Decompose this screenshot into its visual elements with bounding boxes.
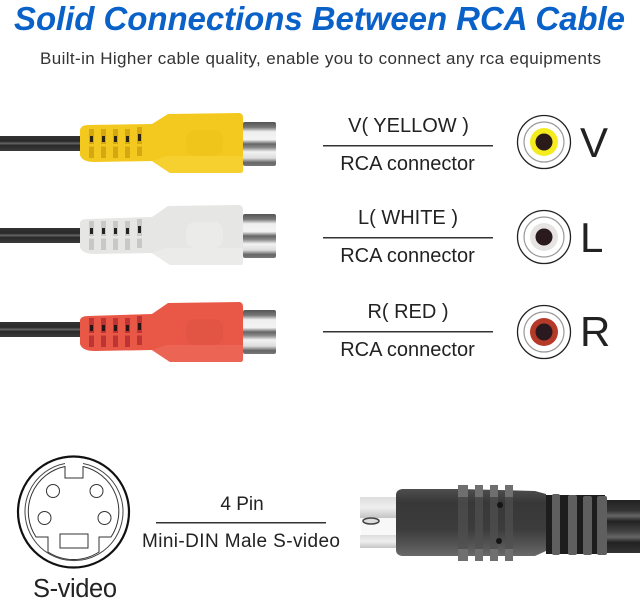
icon: L jack: L: [580, 214, 603, 261]
mini-DIN plug: [360, 485, 640, 561]
white RCA connector: [0, 205, 276, 265]
icon: L jack: [518, 210, 603, 264]
red RCA connector: [0, 302, 276, 362]
icon: R jack: [518, 306, 610, 358]
strain relief: [546, 495, 605, 554]
title: Solid Connections Between RCA Cable: [14, 0, 625, 37]
label: R red: RCA connector: [340, 339, 475, 361]
label: R red: R( RED ): [367, 301, 449, 323]
label: R red: [323, 301, 493, 361]
plug body: [396, 489, 546, 556]
label: L white: [323, 207, 493, 267]
subtitle: Built-in Higher cable quality, enable you to connect any rca equipments: [40, 49, 601, 68]
pins: [360, 497, 397, 548]
label: V yellow: RCA connector: [340, 153, 475, 175]
icon: V jack: [518, 116, 608, 168]
label: L white: RCA connector: [340, 245, 475, 267]
label: 4 pin mini-DIN: [142, 494, 340, 552]
icon: V jack: V: [580, 119, 608, 166]
label: 4 pin mini-DIN: 4 Pin: [220, 494, 264, 515]
yellow RCA connector: [0, 113, 276, 173]
cable bundle: [600, 500, 640, 553]
icon: R jack: R: [580, 308, 610, 355]
label: L white: L( WHITE ): [358, 207, 458, 229]
label: V yellow: [323, 115, 493, 175]
label: V yellow: V( YELLOW ): [348, 115, 469, 137]
grip ribs: [458, 485, 513, 561]
label: 4 pin mini-DIN: Mini-DIN Male S-video: [142, 531, 340, 552]
icon: S-video pinout: [18, 456, 129, 568]
